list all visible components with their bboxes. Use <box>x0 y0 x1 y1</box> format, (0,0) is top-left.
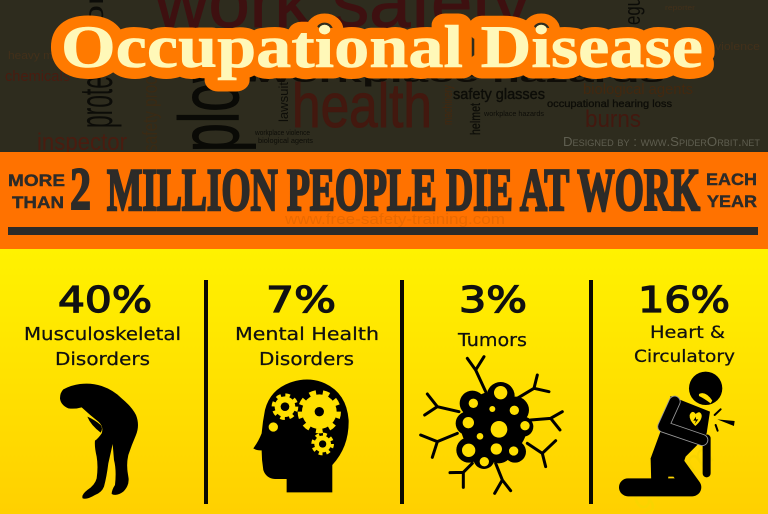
stat: 40% <box>24 280 181 370</box>
stat: 40%: Musculoskeletal <box>24 324 181 345</box>
panel: header word cloud <box>0 0 768 156</box>
panel: header word cloud: helmet <box>467 103 483 135</box>
icon: head with gears <box>253 379 349 492</box>
panel: header word cloud: biological agents <box>583 81 693 98</box>
panel: header word cloud: safety glasses <box>453 86 545 103</box>
stat: 16%: 16% <box>638 280 730 321</box>
banner text: more than: MORE <box>8 171 65 190</box>
stat: 3%: 3% <box>459 280 527 321</box>
icon: tumor cell <box>421 357 562 493</box>
panel: header word cloud: burns <box>585 106 641 133</box>
panel: header word cloud: violence <box>715 41 760 53</box>
icon: bent over man <box>60 384 138 499</box>
panel: statistics <box>0 249 768 514</box>
stat: 3% <box>457 280 527 351</box>
stat: 40%: Disorders <box>55 349 150 370</box>
panel: header word cloud: machinery <box>440 85 455 125</box>
icon: man with heart attack <box>628 372 735 487</box>
title: Occupational Disease <box>61 14 703 80</box>
stat: 7% <box>235 280 379 370</box>
panel: header word cloud: lawsuit <box>276 82 291 122</box>
panel: header word cloud: biological agents <box>258 138 314 145</box>
stat: 16%: Heart & <box>650 323 725 343</box>
panel: header word cloud: ploy <box>162 57 256 152</box>
stat: 7%: Mental Health <box>235 324 379 345</box>
credit text: Designed by : www.SpiderOrbit.net <box>563 134 760 149</box>
panel: header word cloud: inspector <box>37 129 127 156</box>
stat: 7%: 7% <box>266 280 336 321</box>
panel: header word cloud: chemicals <box>5 68 70 85</box>
stat: 16%: Circulatory <box>634 347 735 367</box>
panel: header word cloud: occupational hearing loss <box>547 99 672 110</box>
watermark: www.free-safety-training.com <box>284 211 505 228</box>
title: Occupational Disease <box>61 14 703 80</box>
banner text: each year: YEAR <box>707 192 757 211</box>
banner text: each year <box>706 170 757 211</box>
panel: header word cloud: heavy m <box>8 50 53 62</box>
panel: header word cloud: workplace hazards <box>253 62 665 87</box>
panel: header word cloud: reporter <box>665 5 696 12</box>
banner text: each year: EACH <box>706 170 757 189</box>
banner text: more than <box>8 171 65 212</box>
banner text: headline: 2 <box>70 156 91 222</box>
stat: 40%: 40% <box>58 280 152 321</box>
panel: orange banner <box>0 152 768 249</box>
panel: header word cloud: workplace violence <box>254 130 310 137</box>
heart <box>690 412 702 426</box>
banner text: more than: THAN <box>12 193 64 212</box>
stat: 3%: Tumors <box>457 330 527 351</box>
stat: 7%: Disorders <box>259 349 354 370</box>
banner rule <box>8 227 758 235</box>
panel: header word cloud: safety proc <box>140 77 162 152</box>
panel: header word cloud: workplace hazards <box>483 111 545 118</box>
stat: 16% <box>634 280 735 367</box>
panel: header word cloud: health <box>292 72 432 141</box>
